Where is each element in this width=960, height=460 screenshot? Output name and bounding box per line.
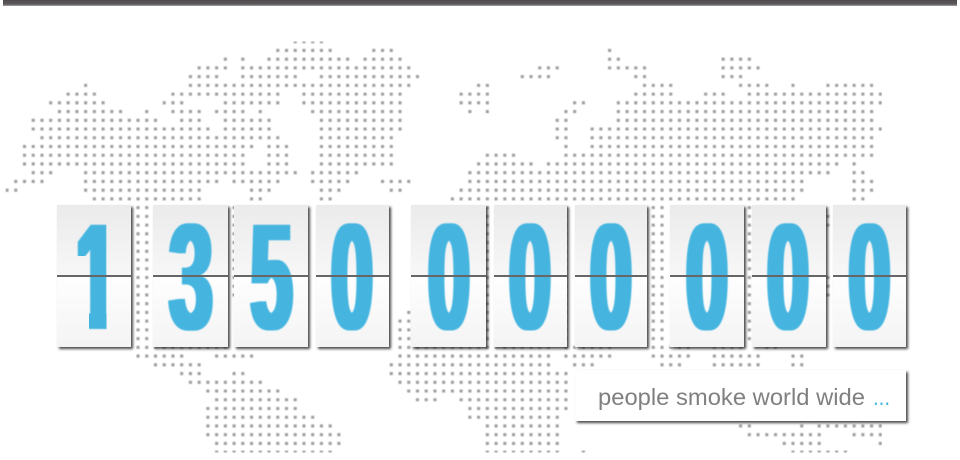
card 2: digit 3 xyxy=(153,192,228,362)
card 1: digit 1: 1 xyxy=(76,193,117,362)
callout: people smoke world wide: people smoke world wide xyxy=(598,384,865,410)
callout: people smoke world wide xyxy=(575,370,906,421)
card 3: digit 5 xyxy=(234,193,308,362)
card 5: digit 0 xyxy=(411,193,486,362)
card 10: digit 0 xyxy=(833,193,906,362)
card 3: digit 5: 5 xyxy=(251,193,292,362)
card 6: digit 0 xyxy=(494,193,567,362)
card 2: digit 3: 3 xyxy=(169,192,213,362)
card 7: digit 0: 0 xyxy=(590,193,632,362)
callout: people smoke world wide: ... xyxy=(873,384,890,410)
card 1: digit 1 xyxy=(57,193,131,362)
card 7: digit 0 xyxy=(575,193,647,362)
card 4: digit 0: 0 xyxy=(331,193,373,362)
card 8: digit 0 xyxy=(670,193,744,362)
card 6: digit 0: 0 xyxy=(509,193,551,362)
card 9: digit 0: 0 xyxy=(767,193,809,362)
top bar xyxy=(3,0,957,6)
card 10: digit 0: 0 xyxy=(849,193,890,362)
card 9: digit 0 xyxy=(752,193,826,362)
card 5: digit 0: 0 xyxy=(428,193,470,362)
card 4: digit 0 xyxy=(316,193,389,362)
card 8: digit 0: 0 xyxy=(686,193,728,362)
